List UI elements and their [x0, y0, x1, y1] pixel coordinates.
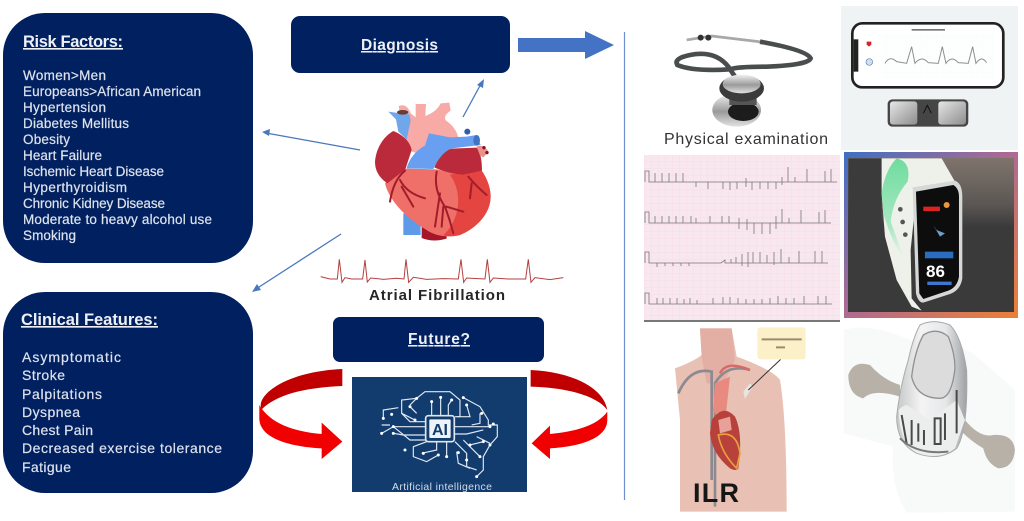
heading: clinical features: Clinical Features: — [21, 311, 158, 329]
list: clinical features: Stroke — [22, 367, 65, 383]
list: clinical features: Chest Pain — [22, 422, 93, 438]
label: atrial fibrillation: Atrial Fibrillation — [369, 287, 505, 304]
list: risk factors: Ischemic Heart Disease — [23, 164, 164, 179]
image: adhesive patch monitor — [844, 322, 1015, 513]
panel: diagnosis — [291, 16, 510, 73]
heading: future: Future? — [408, 331, 470, 348]
list: risk factors: Smoking — [23, 228, 76, 243]
divider line — [624, 32, 626, 500]
list: risk factors: Europeans>African American — [23, 84, 201, 99]
label: watch heart rate: 86 — [926, 262, 945, 281]
list: risk factors: Hypertension — [23, 100, 106, 115]
label: AI chip: AI — [432, 422, 448, 439]
image: 12-lead ECG — [644, 155, 840, 322]
panel: clinical features — [3, 292, 253, 493]
heading: diagnosis: Diagnosis — [361, 37, 438, 54]
list: clinical features: Decreased exercise tolerance — [22, 440, 222, 456]
panel: risk factors — [3, 13, 253, 263]
list: clinical features — [22, 349, 222, 475]
icon: AI circuit brain — [380, 392, 497, 478]
list: clinical features: Palpitations — [22, 386, 102, 402]
arrow: left curved red — [259, 369, 342, 459]
list: risk factors: Women>Men — [23, 68, 106, 83]
list: clinical features: Asymptomatic — [22, 349, 121, 365]
arrow: heart to clinical features — [252, 234, 341, 292]
panel: artificial intelligence — [352, 377, 527, 493]
list: risk factors: Diabetes Mellitus — [23, 116, 129, 131]
chart: AF rhythm trace — [321, 259, 563, 282]
list: risk factors: Chronic Kidney Disease — [23, 196, 165, 211]
list: risk factors: Hyperthyroidism — [23, 180, 127, 195]
list: risk factors — [23, 68, 212, 243]
label: artificial intelligence: Artificial intelligence — [392, 481, 492, 493]
image: implantable loop recorder diagram — [675, 327, 806, 512]
image: stethoscope — [677, 35, 811, 127]
arrow: heart to risk factors — [262, 129, 360, 150]
heading: risk factors: Risk Factors: — [23, 33, 123, 51]
list: risk factors: Heart Failure — [23, 148, 102, 163]
image: smartwatch — [844, 152, 1018, 318]
label: ILR: ILR — [693, 478, 739, 508]
list: clinical features: Fatigue — [22, 459, 71, 475]
list: clinical features: Dyspnea — [22, 404, 80, 420]
arrow: right curved red — [531, 370, 607, 459]
image: phone and KardiaMobile device — [841, 6, 1018, 150]
panel: future — [333, 317, 544, 362]
arrow: diagnosis to tests — [518, 31, 614, 59]
list: risk factors: Obesity — [23, 132, 70, 147]
label: physical examination: Physical examination — [664, 131, 828, 148]
icon: anatomical heart — [375, 103, 491, 240]
list: risk factors: Moderate to heavy alcohol use — [23, 212, 212, 227]
arrow: heart to diagnosis — [463, 79, 484, 117]
